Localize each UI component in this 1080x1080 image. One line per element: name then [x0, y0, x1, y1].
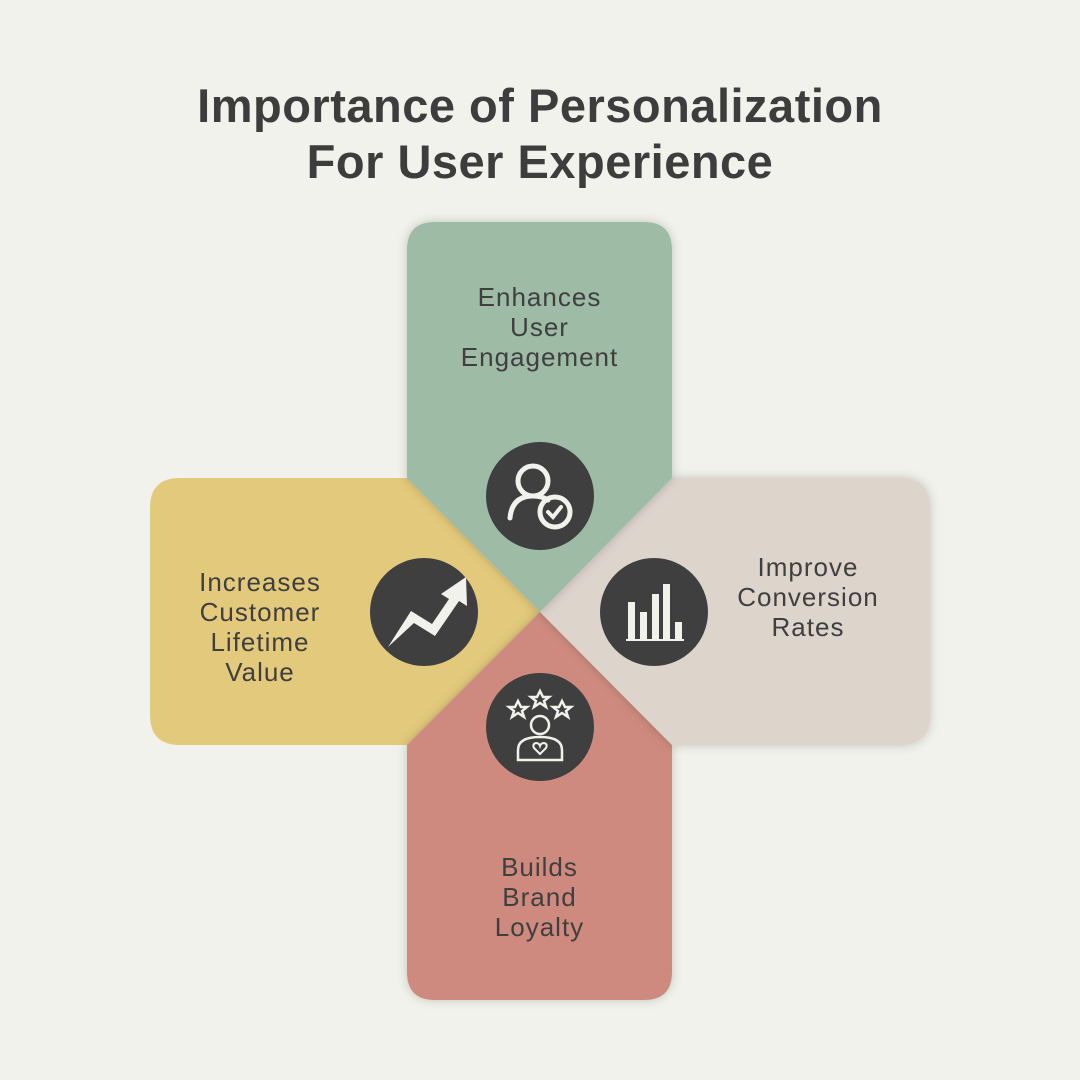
title: Importance of Personalization — [197, 79, 883, 132]
panel: beige — [540, 478, 930, 745]
text: conversion: Improve — [758, 552, 858, 582]
text: loyalty: Brand — [502, 882, 577, 912]
text: engagement — [461, 282, 618, 372]
text: conversion — [737, 552, 879, 642]
title — [197, 79, 883, 188]
text: loyalty — [495, 852, 584, 942]
icon: user stars — [486, 673, 594, 781]
panel: red — [407, 612, 672, 1000]
text: engagement: User — [510, 312, 569, 342]
text: lifetime value: Customer — [200, 597, 320, 627]
text: conversion: Conversion — [737, 582, 879, 612]
text: lifetime value: Increases — [199, 567, 321, 597]
panel: green — [407, 222, 672, 612]
panel: yellow — [150, 478, 540, 745]
icon: growth arrow — [370, 558, 478, 666]
text: conversion: Rates — [772, 612, 844, 642]
text: lifetime value: Value — [225, 657, 295, 687]
text: loyalty: Loyalty — [495, 912, 584, 942]
icon: bar chart — [600, 558, 708, 666]
icon: user check — [486, 442, 594, 550]
text: lifetime value: Lifetime — [210, 627, 310, 657]
title: For User Experience — [307, 135, 773, 188]
text: loyalty: Builds — [501, 852, 578, 882]
text: engagement: Engagement — [461, 342, 618, 372]
text: lifetime value — [199, 567, 321, 687]
text: engagement: Enhances — [478, 282, 601, 312]
